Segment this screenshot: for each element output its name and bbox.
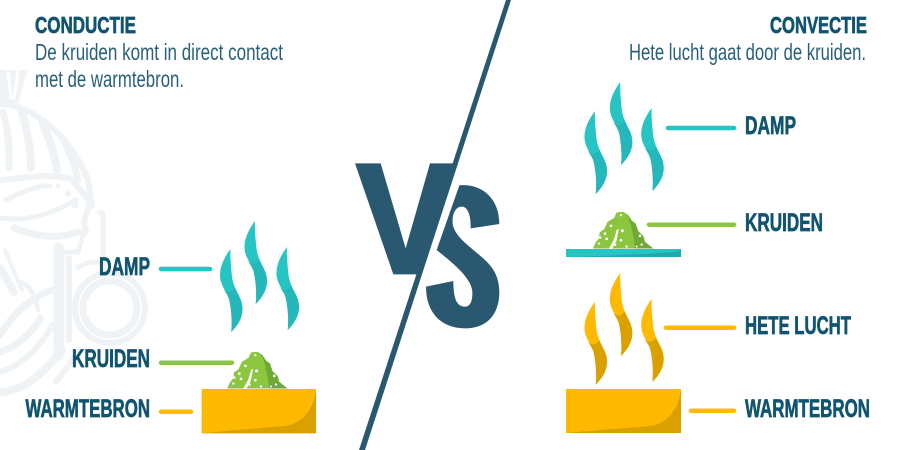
connector: hete lucht: [666, 325, 734, 330]
icon: heat source: [202, 389, 316, 433]
description: conductie: De kruiden komt in direct contact: [35, 39, 283, 65]
icon: hot air: [584, 273, 664, 385]
label: damp: DAMP: [745, 112, 796, 140]
label: hete lucht: HETE LUCHT: [745, 312, 851, 340]
connector: warmtebron: [161, 409, 191, 414]
label: kruiden: KRUIDEN: [72, 345, 150, 373]
connector: damp: [161, 267, 210, 271]
icon: heat source: [566, 389, 681, 433]
letter S: [426, 185, 499, 328]
label: warmtebron: WARMTEBRON: [26, 395, 150, 423]
connector: kruiden: [649, 222, 734, 227]
icon: vapour: [584, 82, 664, 194]
connector: kruiden: [161, 360, 232, 365]
heading: conductie: CONDUCTIE: [35, 12, 136, 38]
connector: warmtebron: [691, 408, 734, 413]
description: conductie: met de warmtebron.: [35, 66, 184, 92]
divider line: [359, 0, 511, 450]
VS mark: [355, 163, 499, 328]
icon: herb plate: [566, 249, 681, 257]
connector: damp: [668, 126, 734, 130]
panel: convectie: [566, 12, 870, 433]
icon: herbs: [593, 212, 653, 249]
letter V: [355, 163, 457, 274]
watermark: helmeted figure: [0, 70, 145, 392]
panel: conductie: [26, 12, 316, 433]
label: kruiden: KRUIDEN: [745, 209, 823, 237]
icon: herbs: [227, 352, 288, 389]
description: conductie: [35, 39, 283, 92]
label: damp: DAMP: [99, 253, 150, 281]
icon: vapour: [220, 221, 299, 332]
